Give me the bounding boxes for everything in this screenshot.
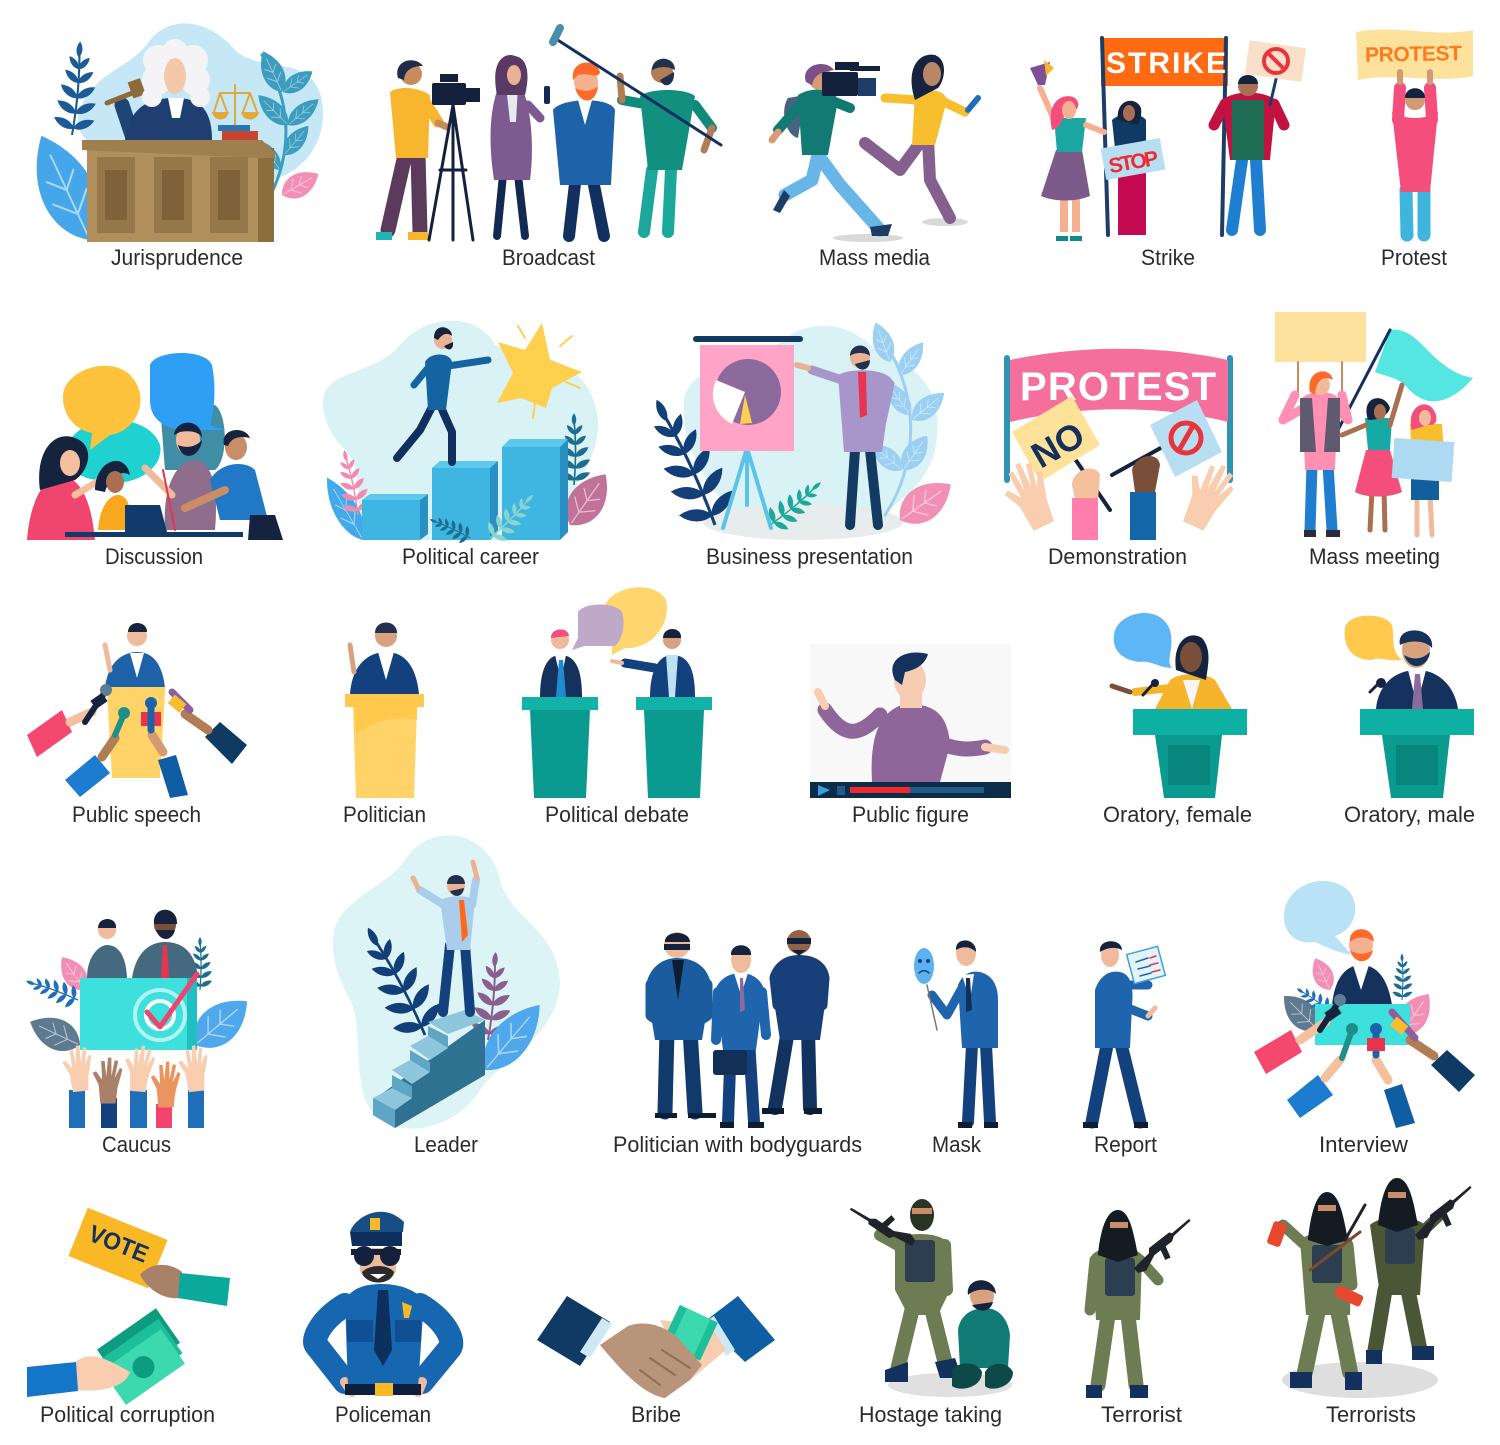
illustration: voting box and raised hands — [22, 910, 259, 1128]
illustration: presenter with pie chart board — [630, 319, 961, 540]
label: Public speech — [72, 802, 201, 827]
illustration: two armed masked men — [1266, 1178, 1482, 1398]
item: Political corruption — [27, 1208, 230, 1427]
label: Bribe — [631, 1402, 681, 1427]
illustration: armed man and kneeling hostage — [849, 1194, 1013, 1397]
illustration: broadcast crew — [376, 28, 721, 240]
label: Political career — [402, 544, 539, 569]
label: Report — [1094, 1132, 1157, 1157]
label: Hostage taking — [859, 1402, 1002, 1427]
illustration: striking workers: STRIKE — [1106, 47, 1226, 80]
illustration: video player with speaker — [810, 644, 1011, 798]
illustration: man reading a report — [1083, 941, 1165, 1128]
label: Discussion — [105, 544, 203, 569]
item: Terrorist — [1086, 1210, 1201, 1427]
label: Policeman — [335, 1402, 431, 1427]
item: Oratory, female — [1103, 613, 1252, 827]
item: Mass media — [772, 55, 978, 270]
illustration: protest banner and raised hands: PROTEST — [1020, 365, 1216, 409]
illustration: striking workers: STOP — [1107, 147, 1160, 178]
label: Mass meeting — [1309, 544, 1440, 569]
item: Jurisprudence — [17, 23, 324, 270]
illustration: interviewee surrounded by microphones — [1254, 881, 1475, 1128]
illustration: man speaking at lectern — [1345, 616, 1474, 798]
item: Mask — [914, 940, 998, 1157]
label: Business presentation — [706, 544, 913, 569]
item: Demonstration — [995, 349, 1241, 569]
illustration: woman speaking at lectern — [1112, 613, 1247, 798]
label: Oratory, female — [1103, 802, 1252, 827]
illustration: politician at yellow lectern — [345, 622, 424, 798]
illustration: speaker surrounded by microphones — [27, 623, 247, 798]
item: Broadcast — [376, 28, 721, 270]
item: Strike — [1030, 38, 1306, 270]
illustration: man with protest banner: PROTEST — [1365, 42, 1462, 67]
item: Interview — [1254, 881, 1475, 1157]
label: Political debate — [545, 802, 689, 827]
illustration: group discussion with speech bubbles — [27, 353, 283, 540]
item: Oratory, male — [1344, 616, 1475, 827]
label: Broadcast — [502, 245, 595, 270]
label: Politician — [343, 802, 426, 827]
item: Political debate — [522, 587, 712, 827]
item: Politician with bodyguards — [613, 930, 862, 1157]
item: Political career — [317, 321, 620, 569]
item: Policeman — [315, 1212, 451, 1427]
illustration: politician holding a mask — [914, 940, 998, 1128]
item: Discussion — [27, 353, 283, 569]
illustration: leader on top of stairs — [333, 835, 560, 1129]
item: Business presentation — [630, 319, 961, 569]
item: Leader — [333, 835, 560, 1157]
item: Report — [1083, 941, 1165, 1157]
illustration: crowd with flag and placards — [1275, 312, 1473, 537]
illustration: vote card traded for cash: VOTE — [85, 1220, 152, 1269]
item: Hostage taking — [849, 1194, 1013, 1427]
label: Political corruption — [40, 1402, 215, 1427]
item: Public figure — [810, 644, 1011, 827]
illustration: climbing career steps to a star — [317, 321, 620, 548]
illustration: man with protest banner — [1356, 29, 1473, 235]
label: Demonstration — [1048, 544, 1187, 569]
label: Politician with bodyguards — [613, 1132, 862, 1157]
item: Terrorists — [1266, 1178, 1482, 1427]
item: Public speech — [27, 623, 247, 827]
label: Strike — [1141, 245, 1195, 270]
label: Mask — [932, 1132, 982, 1157]
label: Terrorist — [1101, 1402, 1182, 1427]
item: Politician — [343, 622, 426, 827]
illustration: protest banner and raised hands: NO — [1024, 414, 1091, 476]
illustration: protest banner and raised hands — [995, 349, 1241, 540]
illustration: running reporters — [772, 55, 978, 242]
illustration: politician with two bodyguards — [646, 930, 829, 1128]
label: Leader — [414, 1132, 478, 1157]
item: Mass meeting — [1275, 312, 1473, 569]
label: Caucus — [102, 1132, 171, 1157]
illustration: striking workers — [1030, 38, 1306, 241]
label: Terrorists — [1326, 1402, 1416, 1427]
label: Mass media — [819, 245, 931, 270]
illustration: armed masked man — [1086, 1210, 1201, 1398]
label: Jurisprudence — [111, 245, 243, 270]
item: Bribe — [537, 1296, 775, 1427]
illustration: handshake with money — [537, 1296, 775, 1398]
label: Interview — [1319, 1132, 1408, 1157]
label: Protest — [1381, 245, 1447, 270]
item: Caucus — [22, 910, 259, 1157]
label: Public figure — [852, 802, 969, 827]
item: Protest — [1356, 29, 1473, 270]
illustration: police officer — [315, 1212, 451, 1396]
label: Oratory, male — [1344, 802, 1475, 827]
illustration: judge at bench — [17, 23, 324, 251]
illustration: two debaters at teal lecterns — [522, 587, 712, 798]
illustration: vote card traded for cash — [27, 1208, 230, 1405]
